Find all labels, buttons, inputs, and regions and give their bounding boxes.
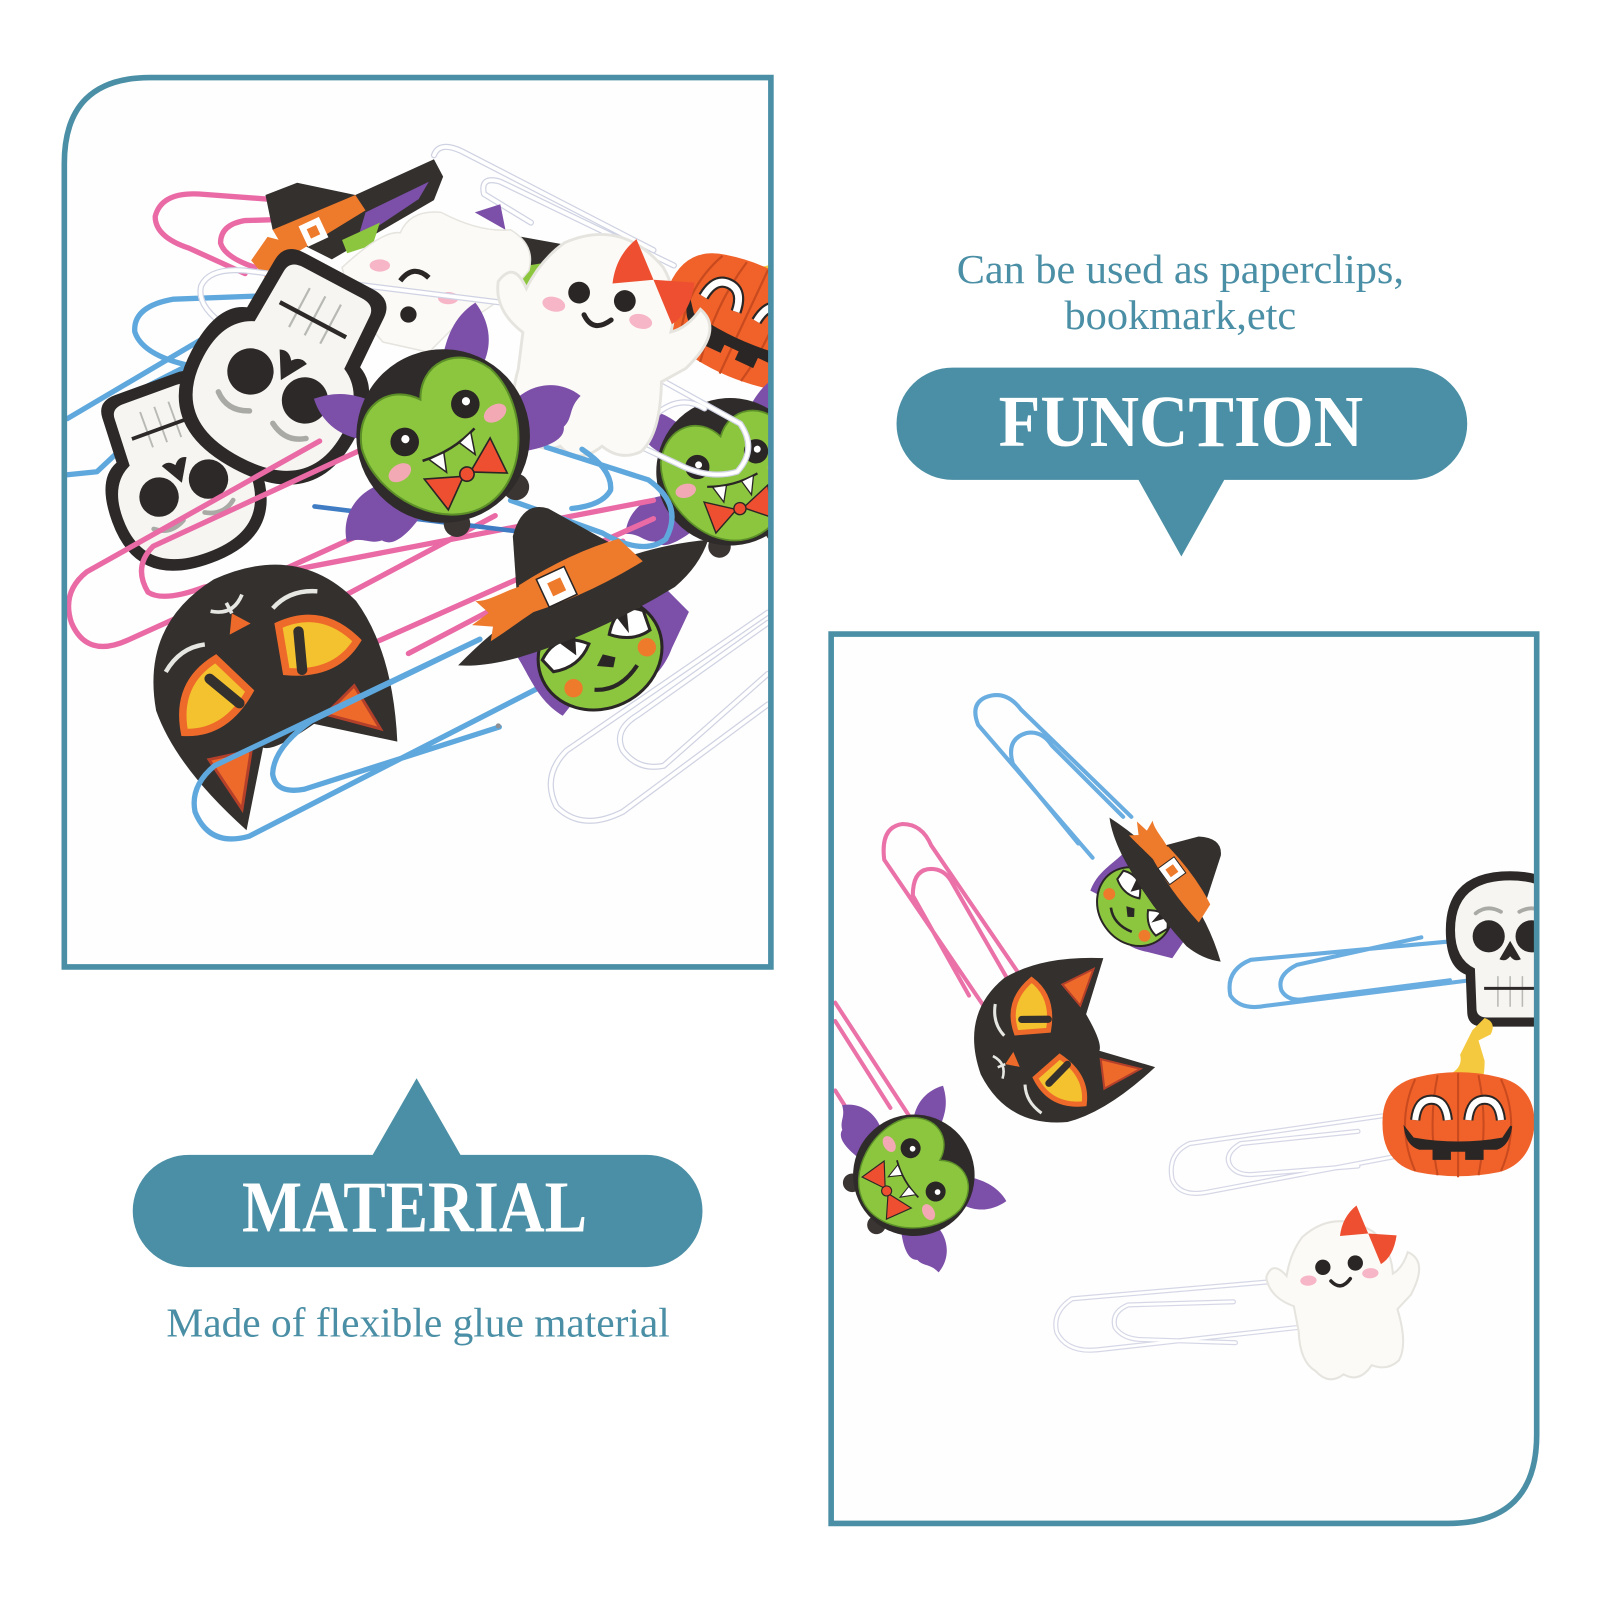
- ghost behind: [342, 212, 530, 352]
- blue clip and skull: [1227, 871, 1534, 1027]
- ghost in front: [496, 233, 712, 457]
- panel: six bookmarks photo: [834, 693, 1534, 1380]
- witch hat at top: [251, 159, 443, 278]
- callout: material: MATERIAL: [242, 1165, 587, 1247]
- black cat: [153, 564, 398, 830]
- panel frame: product pile: [64, 78, 771, 967]
- blue clip and witch: [973, 693, 1221, 962]
- white clip over pile: [197, 267, 500, 320]
- callout: material: [133, 1078, 702, 1267]
- dark blue strand: [314, 506, 531, 533]
- pumpkin cropped: [671, 253, 768, 388]
- green vampire behind: [626, 382, 768, 558]
- text: function description: [957, 247, 1404, 338]
- pink clip and cat: [884, 824, 1162, 1147]
- pink paperclip upper left: [155, 194, 281, 274]
- skull front: [178, 249, 386, 484]
- white paperclip at top: [434, 147, 674, 265]
- text: function description: bookmark,etc: [1064, 293, 1296, 338]
- white paperclip lower right: [551, 613, 768, 821]
- white clip and ghost: [1056, 1203, 1426, 1383]
- text: function description: Can be used as paperclips,: [957, 247, 1404, 292]
- dark vampire behind ghost: [474, 204, 561, 285]
- blue paperclips left: [67, 296, 255, 475]
- callout: function: FUNCTION: [999, 380, 1363, 462]
- blue paperclip lower: [194, 639, 536, 839]
- vampire: [314, 302, 580, 542]
- pink large paperclip: [69, 441, 653, 653]
- white clip and pumpkin: [1171, 1018, 1535, 1193]
- panel frame: six bookmarks: [831, 634, 1537, 1523]
- second skull: [101, 371, 267, 571]
- white paperclip right: [644, 380, 752, 478]
- callout: function: [897, 368, 1467, 556]
- blue paperclip right: [511, 447, 672, 546]
- text: material description: Made of flexible glue material: [166, 1301, 670, 1346]
- panel: product pile photo: [67, 144, 768, 842]
- witch: [458, 507, 708, 716]
- pink clip and vampire: [834, 1000, 1006, 1272]
- clip end: [496, 723, 501, 729]
